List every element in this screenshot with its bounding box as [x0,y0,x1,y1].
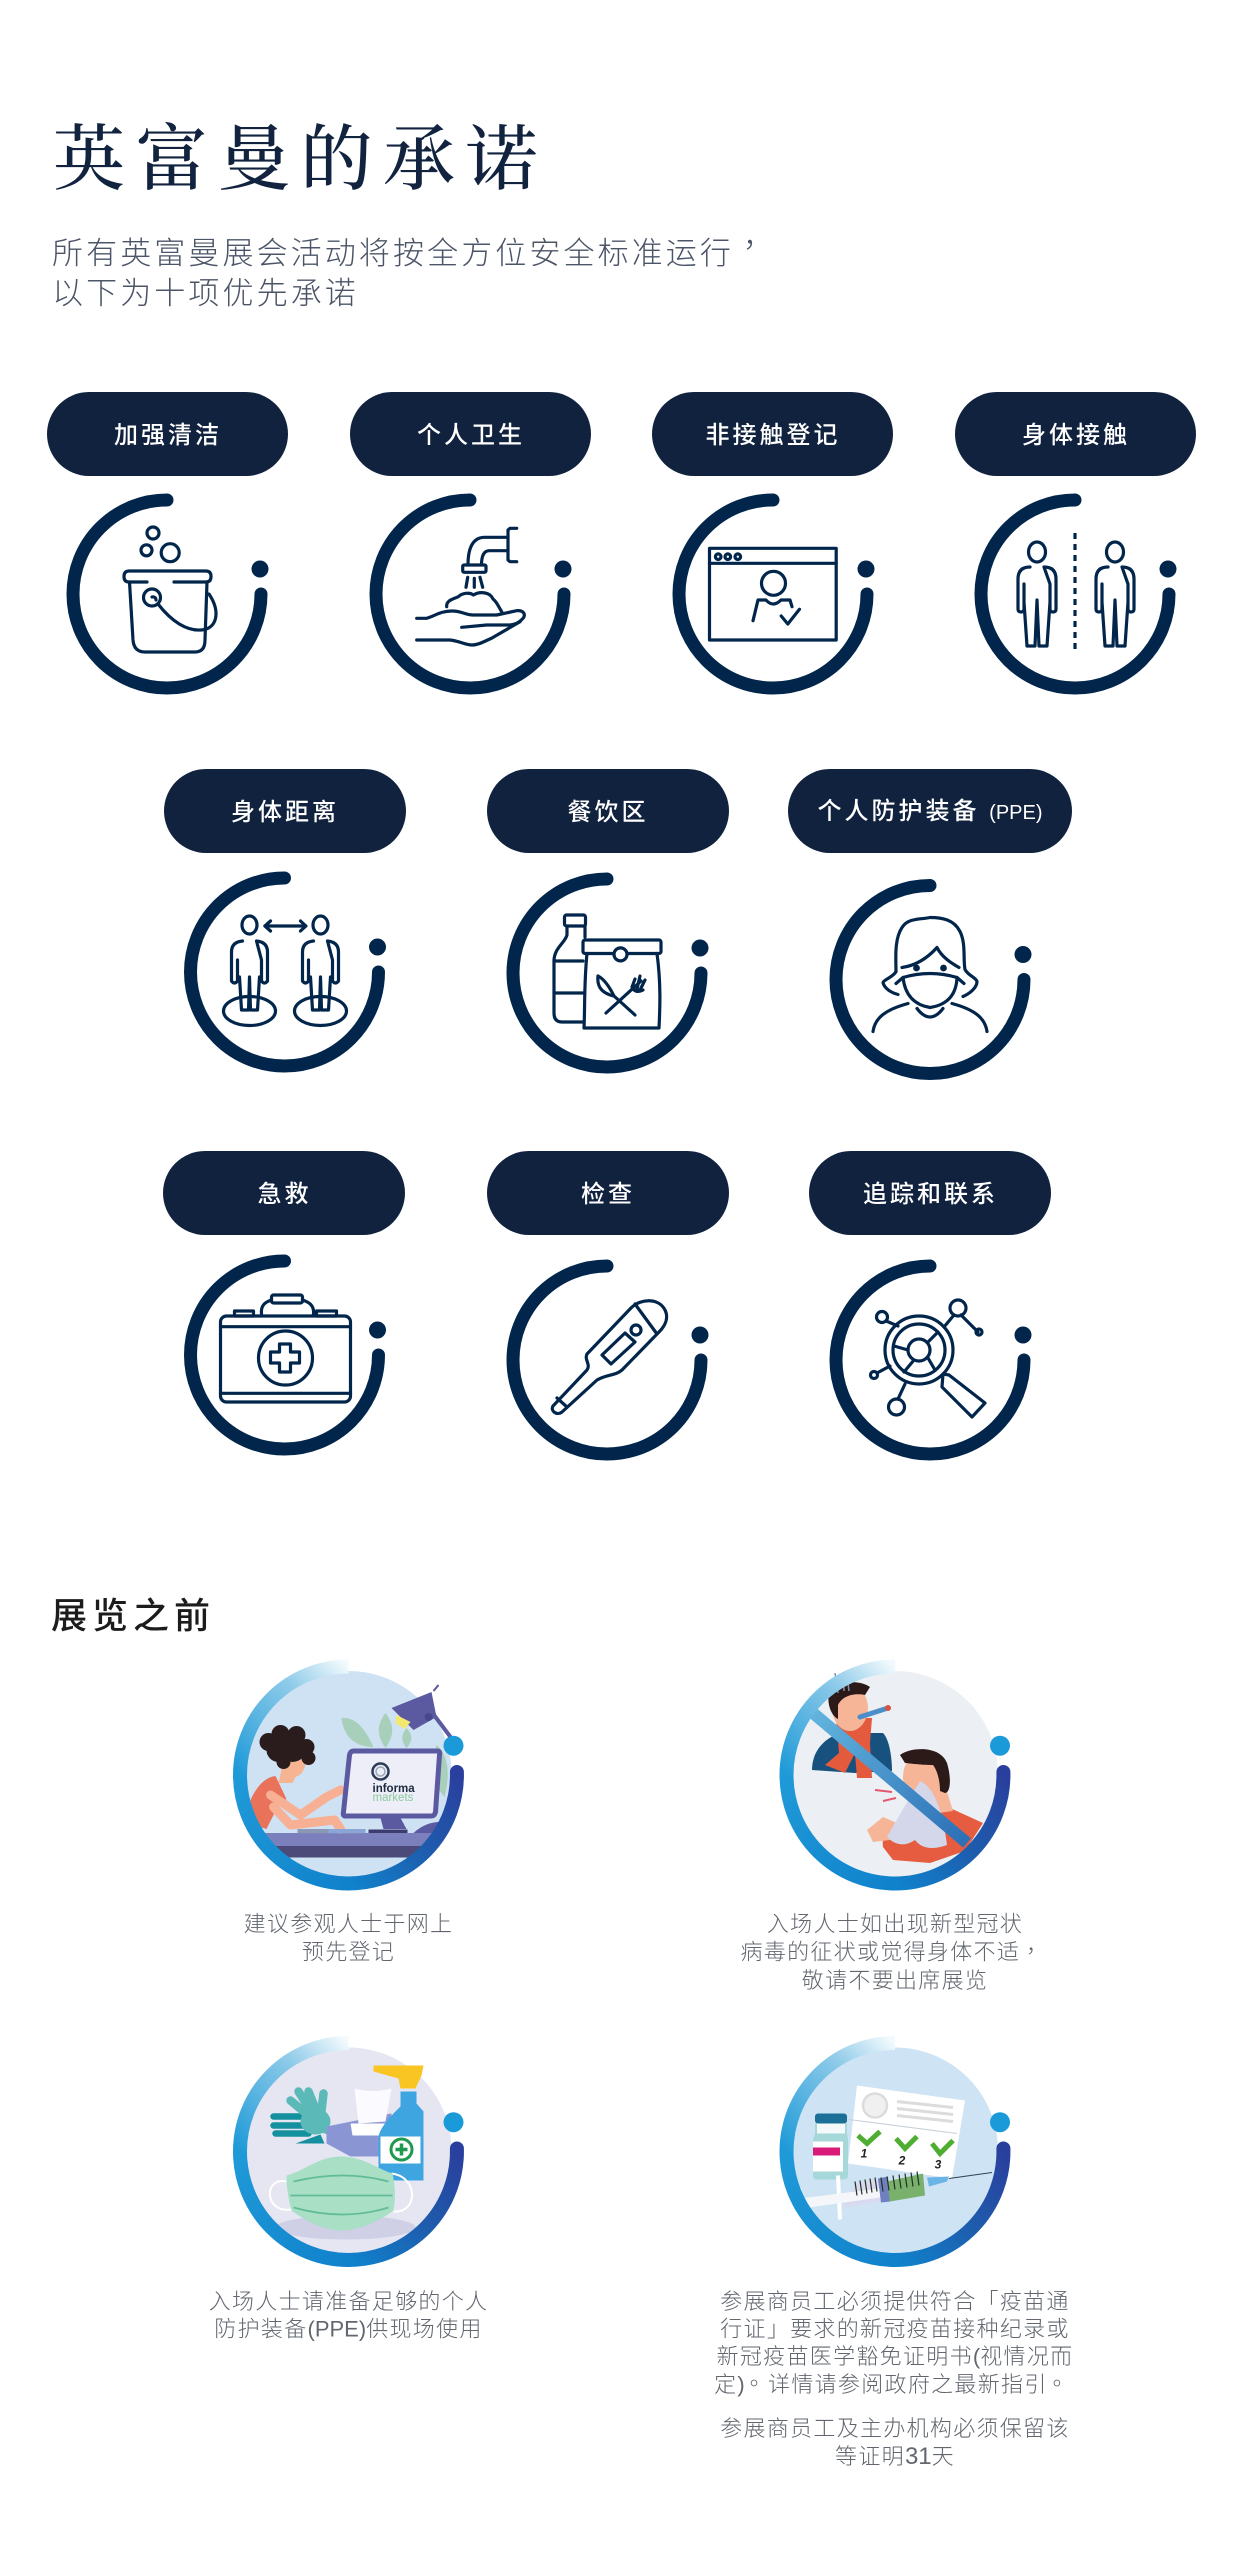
section heading: 展览之前 [51,1595,215,1636]
icon: thermometer [513,1266,708,1454]
icon: magnifier network [836,1266,1032,1454]
subtitle: ， [743,219,777,254]
panel: 身体接触 [955,392,1196,688]
panel: 身体距离 [164,769,406,1066]
caption: 。 [1053,2365,1076,2390]
pill label [163,1151,405,1235]
panel: 追踪和联系 [809,1151,1051,1454]
pill label: 急救 [258,1181,312,1208]
icon: bottle and food bag [513,879,708,1067]
caption: retention note [720,2416,1070,2470]
pill label [788,769,1072,853]
caption: 新冠疫苗医学豁免证明书(视情况而 [717,2344,1073,2369]
icon: distancing people [190,878,386,1066]
icon: browser window with person [679,500,874,688]
panel: 个人卫生 [350,392,591,688]
caption [741,1912,1049,1993]
panel: do not attend if unwell [741,1666,1049,1993]
icon: two people with divider [981,500,1176,688]
panel: 餐饮区 [487,769,729,1067]
pill label: 身体距离 [231,799,339,826]
icon: faucet and hand [376,500,572,688]
illustration: vaccine record, vial, syringe: 3 [935,2158,942,2172]
pill label: 加强清洁 [114,422,222,449]
pill label: 个人防护装备 (PPE) [817,798,1043,825]
subtitle: 所有英富曼展会活动将按全方位安全标准运行 [52,236,734,271]
caption: ， [1026,1932,1049,1958]
pill label: 个人卫生 [417,422,525,449]
caption: retention note: 等证明31天 [835,2443,955,2470]
panel: 急救 [163,1151,405,1449]
caption: 入场人士如出现新型冠状 [767,1912,1023,1936]
caption: 。 [750,2365,773,2390]
icon: first aid kit [190,1261,386,1449]
icon: woman with mask [836,886,1032,1074]
panel: 加强清洁 [47,392,288,688]
pill label: 身体接触 [1022,422,1130,449]
pill label [955,392,1196,476]
illustration: vaccine record, vial, syringe [786,2043,1010,2260]
pill label: 餐饮区 [568,799,648,826]
pill label: 检查 [581,1181,635,1208]
illustration: unwell people struck through [786,1666,1010,1884]
subtitle: 以下为十项优先承诺 [52,276,359,311]
caption [209,2289,488,2342]
caption: 入场人士请准备足够的个人 [209,2289,488,2314]
icon: bucket [73,500,268,688]
pill label [164,769,406,853]
pill label: 追踪和联系 [863,1181,998,1208]
panel: 非接触登记 [652,392,893,688]
caption: 敬请不要出席展览 [802,1968,988,1993]
subtitle [52,219,777,311]
caption: 行证」要求的新冠疫苗接种纪录或 [720,2316,1070,2342]
panel: vaccine pass [714,2043,1076,2470]
caption: 参展商员工必须提供符合「疫苗通 [720,2289,1070,2314]
panel: bring PPE [209,2043,488,2342]
pill label [350,392,591,476]
pill label [809,1151,1051,1235]
pill label [47,392,288,476]
illustration: vaccine record, vial, syringe: 2 [898,2154,906,2168]
pill label: 非接触登记 [706,422,840,449]
caption: 防护装备(PPE)供现场使用 [214,2316,483,2342]
pill label [652,392,893,476]
title: 英富曼的承诺 [53,101,548,205]
caption: 预先登记 [302,1940,395,1964]
caption: 病毒的征状或觉得身体不适 [741,1940,1020,1964]
illustration: person at computer [238,1666,464,1884]
panel: online registration [238,1666,464,1964]
panel: 个人防护装备 [788,769,1072,1074]
caption: 建议参观人士于网上 [244,1912,453,1936]
panel: 检查 [487,1151,729,1454]
illustration: person at computer: markets [372,1792,414,1804]
caption: 定) [714,2372,745,2397]
caption [714,2289,1076,2397]
caption [244,1912,453,1964]
illustration: gloves, tissue, sanitizer, mask [240,2043,464,2260]
illustration: vaccine record, vial, syringe: 1 [861,2146,868,2160]
caption: retention note: 参展商员工及主办机构必须保留该 [720,2416,1070,2441]
illustration: person at computer: informa [372,1783,415,1795]
pill label [487,1151,729,1235]
pill label [487,769,729,853]
caption: 详情请参阅政府之最新指引 [768,2372,1048,2397]
